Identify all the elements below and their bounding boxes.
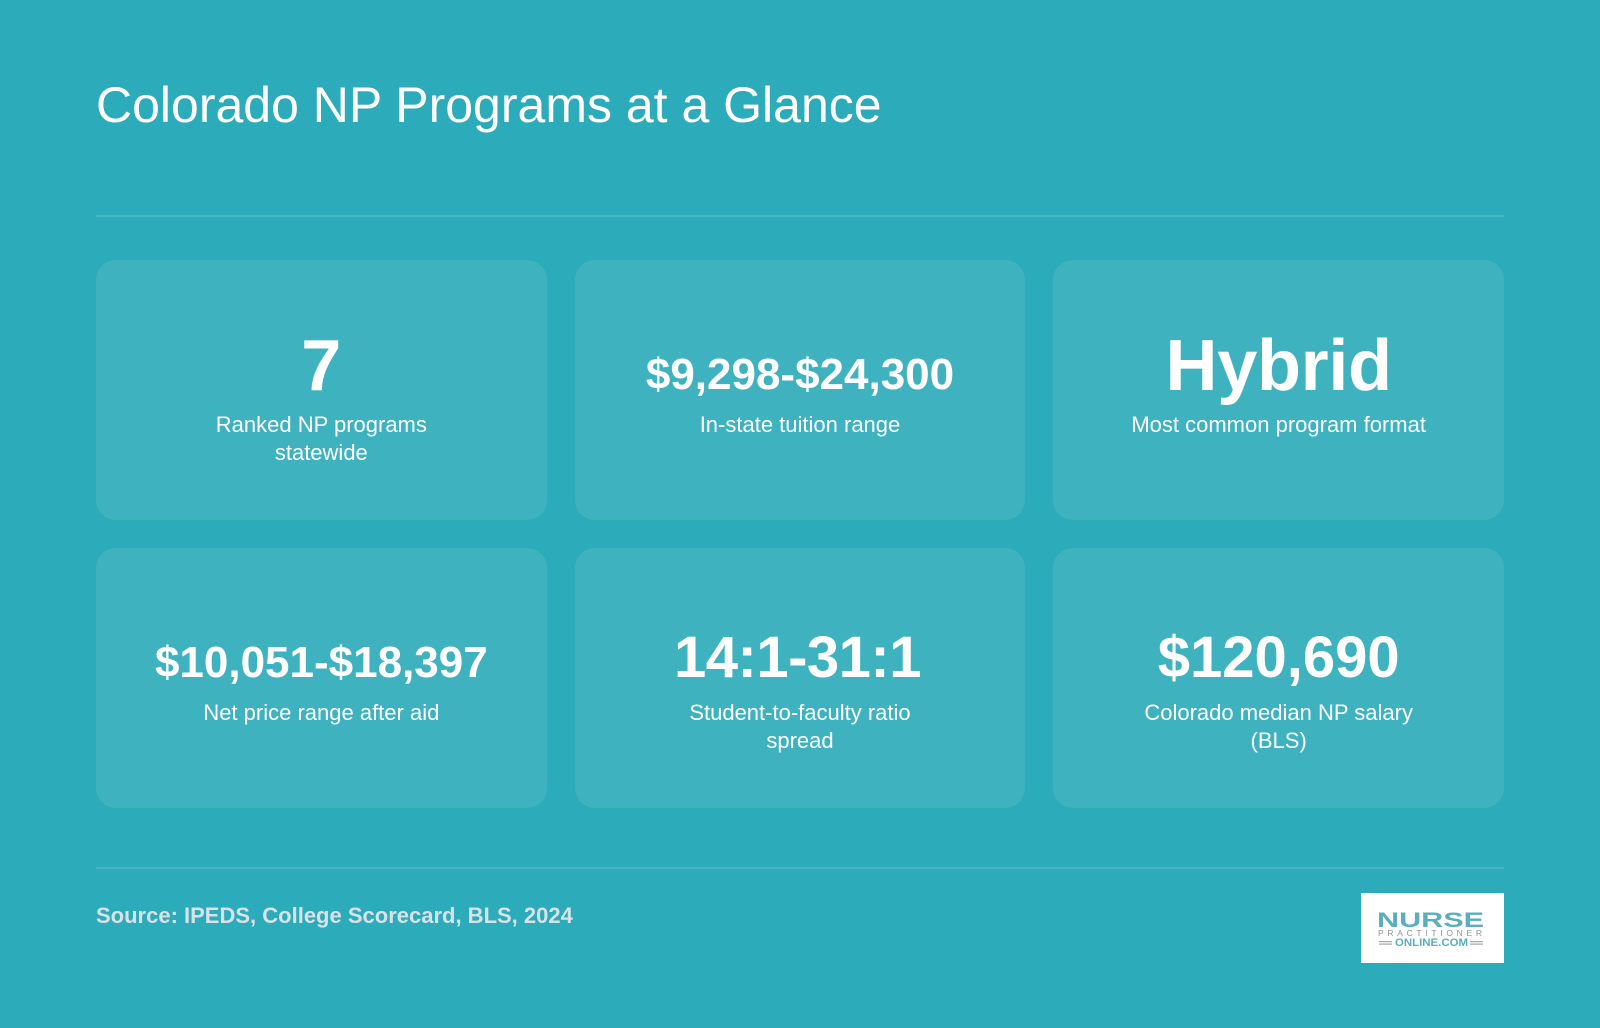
label: ratio: Student-to-faculty ratio [689,700,911,725]
label: salary: (BLS) [1251,728,1307,753]
value: 7: 7 [301,326,341,406]
label: salary [1144,700,1413,753]
panel: in-state tuition [575,260,1025,520]
value: Hybrid: Hybrid [1166,326,1392,406]
logo: Nurse Practitioner Online: PRACTITIONER [1378,928,1482,938]
value: net price range: $10,051-$18,397 [155,638,488,687]
label: net price: Net price range after aid [203,700,439,725]
source note: Source: IPEDS, College Scorecard, BLS, 2024 [96,903,573,928]
label: ranked programs: Ranked NP programs [216,412,427,437]
value: tuition range: $9,298-$24,300 [646,350,954,399]
value: ratio: 14:1-31:1 [674,625,921,690]
panel: ranked programs [96,260,547,520]
label: ratio [689,700,911,753]
label: ratio: spread [766,728,834,753]
title: Colorado NP Programs at a Glance [96,77,882,133]
panel: student-to-faculty ratio [575,548,1025,808]
label: format: Most common program format [1131,412,1426,437]
logo: Nurse Practitioner Online: ONLINE.COM [1395,937,1468,949]
logo: Nurse Practitioner Online [1361,893,1504,963]
label: ranked programs: statewide [275,440,368,465]
label: ranked programs [216,412,427,465]
value: salary: $120,690 [1158,625,1400,690]
logo: Nurse Practitioner Online: NURSE [1377,909,1484,932]
label: salary: Colorado median NP salary [1144,700,1413,725]
panel: median salary [1053,548,1504,808]
label: tuition: In-state tuition range [700,412,900,437]
panel: program format [1053,260,1504,520]
panel: net price [96,548,547,808]
